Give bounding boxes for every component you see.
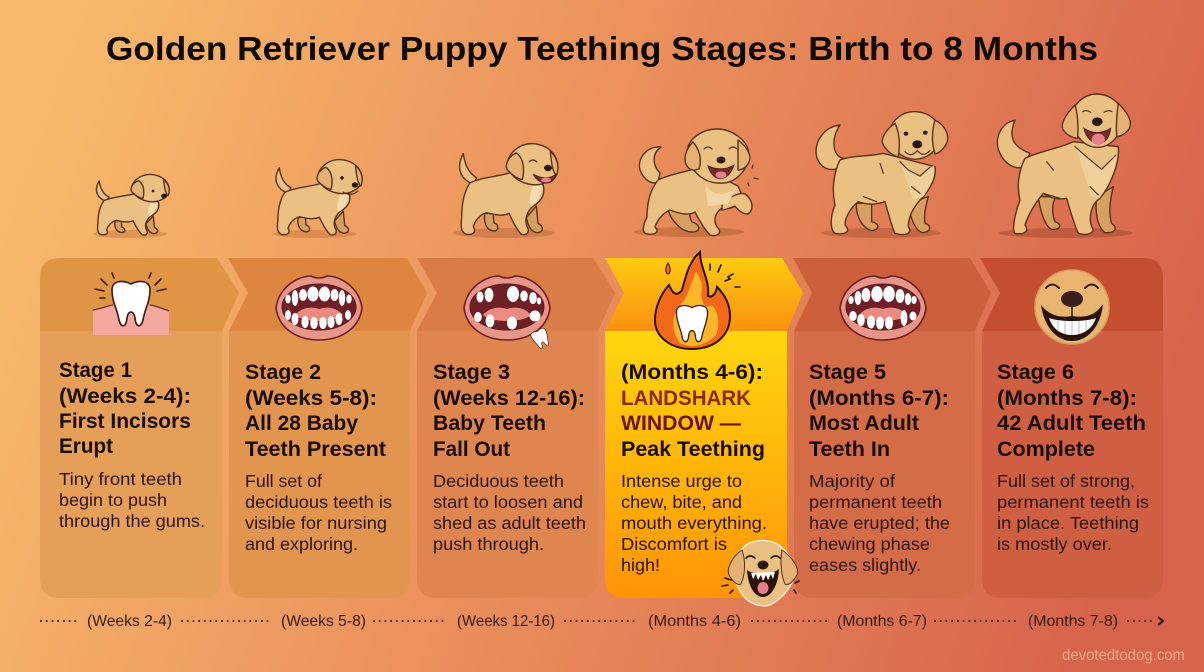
text: stage 5 description: Majority of — [809, 471, 895, 491]
heading: stage 5 — [809, 361, 949, 461]
text: stage 4 description: chew, bite, and — [621, 492, 742, 512]
heading: stage 5: Stage 5 — [809, 361, 886, 384]
dog: stage 1 newborn puppy — [93, 174, 169, 238]
heading: stage 6 — [997, 361, 1146, 461]
heading: landshark window: LANDSHARK — [621, 387, 751, 410]
icon: flaming tooth — [655, 252, 740, 349]
heading: stage 1: (Weeks 2-4): — [59, 385, 191, 408]
dog: stage 3 puppy smiling — [453, 144, 558, 238]
heading: stage 1: First Incisors — [59, 410, 191, 433]
text: stage 6 description: permanent teeth is — [997, 492, 1149, 512]
dog: stage 4 playful puppy with raised paw — [634, 129, 758, 237]
timeline labels: (Months 4-6) — [648, 613, 741, 630]
text: stage 6 description — [997, 471, 1149, 554]
dog: stage 2 puppy — [273, 160, 362, 238]
text: stage 5 description: chewing phase — [809, 534, 930, 554]
heading: stage 6: Complete — [997, 438, 1095, 461]
text: stage 4 description — [621, 471, 767, 575]
text: stage 2 description: deciduous teeth is — [245, 492, 392, 512]
heading: landshark window — [621, 361, 765, 461]
text: stage 4 description: Discomfort is — [621, 534, 727, 554]
puppy row — [93, 94, 1133, 238]
heading: stage 3: (Weeks 12-16): — [433, 387, 585, 410]
text: stage 3 description — [433, 471, 586, 554]
text: stage 2 description: and exploring. — [245, 534, 358, 554]
panel 2 background — [228, 258, 427, 598]
panel: stage 1 — [40, 258, 239, 598]
heading: stage 3: Stage 3 — [433, 361, 510, 384]
text: stage 6 description: Full set of strong, — [997, 471, 1135, 491]
text: stage 4 description: high! — [621, 555, 660, 575]
icon: mouth with mostly adult teeth — [840, 276, 926, 340]
text: stage 6 description: in place. Teething — [997, 513, 1139, 533]
text: stage 2 description: Full set of — [245, 471, 322, 491]
heading: stage 3: Fall Out — [433, 438, 510, 461]
heading: stage 3: Baby Teeth — [433, 412, 546, 435]
panel: stage 3 — [417, 258, 615, 598]
heading: stage 2: (Weeks 5-8): — [245, 387, 377, 410]
panel: stage 5 — [793, 258, 991, 598]
timeline labels — [87, 613, 1118, 630]
heading: stage 3 — [433, 361, 585, 461]
panel 6 background — [980, 258, 1163, 598]
heading: stage 2: All 28 Baby — [245, 412, 358, 435]
icon: excited dog head with bared teeth — [722, 540, 799, 606]
text: stage 6 description: is mostly over. — [997, 534, 1112, 554]
timeline labels: (Months 7-8) — [1028, 613, 1118, 630]
text: stage 5 description: have erupted; the — [809, 513, 950, 533]
text: stage 5 description: permanent teeth — [809, 492, 942, 512]
text: stage 2 description: visible for nursing — [245, 513, 387, 533]
heading: stage 6: (Months 7-8): — [997, 387, 1137, 410]
title: Golden Retriever Puppy Teething Stages: Birth to 8 Months — [106, 30, 1098, 67]
panel 5 background — [793, 258, 991, 598]
text: stage 3 description: start to loosen and — [433, 492, 583, 512]
panel: stage 6 — [980, 258, 1163, 598]
heading: stage 2: Stage 2 — [245, 361, 321, 384]
dog: stage 6 adult — [997, 94, 1133, 238]
heading: stage 2: Teeth Present — [245, 438, 386, 461]
icon: smiling dog face with complete teeth — [1035, 270, 1109, 344]
heading: stage 6: 42 Adult Teeth — [997, 412, 1146, 435]
heading: stage 5: (Months 6-7): — [809, 387, 949, 410]
text: stage 1 description: through the gums. — [59, 511, 205, 531]
heading: landshark window: Peak Teething — [621, 438, 765, 461]
heading: landshark window: WINDOW — — [621, 412, 741, 435]
heading: stage 1 — [59, 359, 191, 458]
dog: stage 5 juvenile — [816, 112, 948, 238]
panel: stage 4 highlighted landshark window — [605, 252, 803, 606]
heading: stage 1: Stage 1 — [59, 359, 132, 382]
heading: stage 1: Erupt — [59, 435, 113, 458]
heading: stage 6: Stage 6 — [997, 361, 1074, 384]
panel 1 background — [40, 258, 239, 598]
text: stage 2 description — [245, 471, 392, 554]
text: stage 4 description: Intense urge to — [621, 471, 742, 491]
panel: stage 2 — [228, 258, 427, 598]
text: stage 3 description: Deciduous teeth — [433, 471, 564, 491]
timeline labels: (Weeks 2-4) — [87, 613, 172, 630]
heading: landshark window: (Months 4-6): — [621, 361, 763, 384]
panel 3 background — [417, 258, 615, 598]
arrow — [1158, 617, 1163, 625]
text: stage 1 description — [59, 469, 205, 531]
watermark: devotedtodog.com — [1062, 647, 1185, 664]
text: stage 5 description: eases slightly. — [809, 555, 921, 575]
icon: mouth with missing teeth and falling tooth — [464, 276, 552, 351]
timeline labels: (Months 6-7) — [837, 613, 927, 630]
text: stage 1 description: Tiny front teeth — [59, 469, 182, 489]
text: stage 4 description: mouth everything. — [621, 513, 767, 533]
heading: stage 5: Most Adult — [809, 412, 919, 435]
heading: stage 2 — [245, 361, 386, 461]
icon: mouth with full baby teeth — [276, 276, 362, 340]
timeline labels: (Weeks 12-16) — [457, 613, 555, 630]
icon: tooth erupting from gum — [93, 273, 169, 335]
panel 4 background — [605, 258, 803, 598]
text: stage 3 description: shed as adult teeth — [433, 513, 586, 533]
heading: stage 5: Teeth In — [809, 438, 890, 461]
text: stage 1 description: begin to push — [59, 490, 167, 510]
text: stage 5 description — [809, 471, 950, 575]
text: stage 3 description: push through. — [433, 534, 544, 554]
timeline labels: (Weeks 5-8) — [281, 613, 366, 630]
timeline — [41, 613, 1163, 630]
